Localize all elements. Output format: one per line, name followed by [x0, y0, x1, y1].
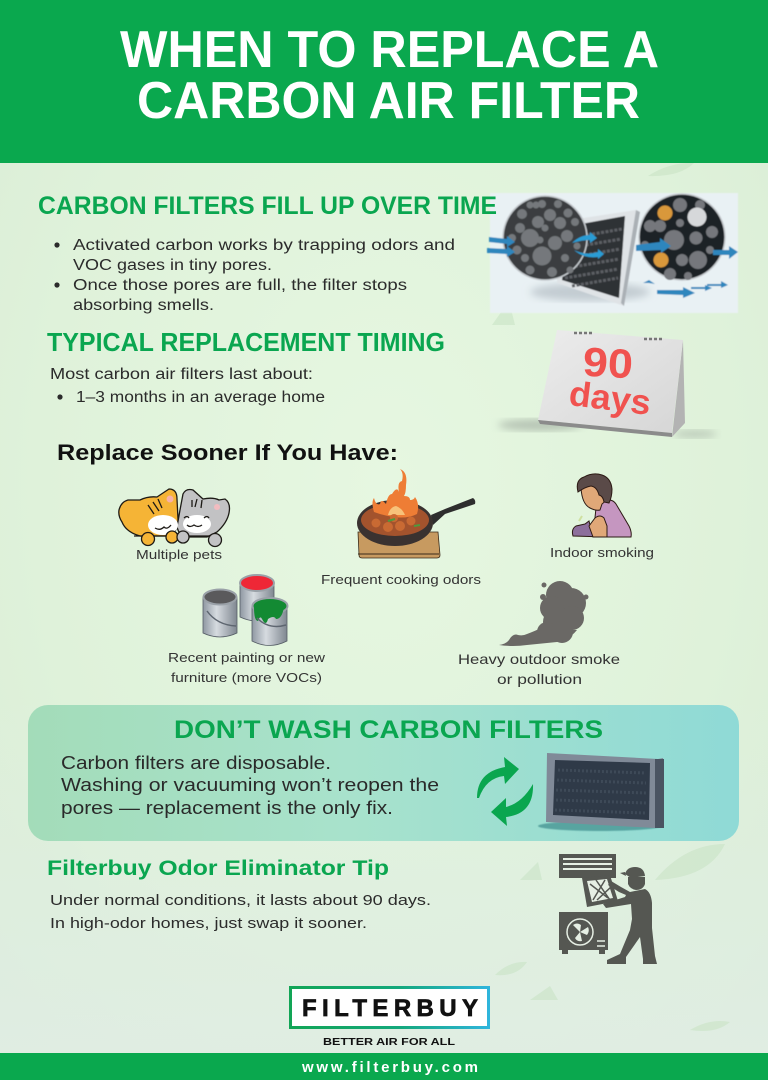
footer bar: [0, 1053, 768, 1080]
icon: carbon filter: [538, 753, 664, 831]
filter frame: [557, 210, 640, 306]
label: Recent painting or new: [168, 650, 326, 665]
panel heading: DON’T WASH CARBON FILTERS: [174, 716, 603, 744]
panel text: Washing or vacuuming won’t reopen the: [61, 775, 439, 795]
bullet list: how carbon works: VOC gases in tiny pores.: [73, 257, 272, 274]
icon: 90 days desk calendar: [498, 330, 717, 438]
label: or pollution: [497, 671, 582, 687]
item: multiple pets: [119, 489, 230, 562]
bullet list: how carbon works: absorbing smells.: [73, 297, 214, 314]
panel: don't wash carbon filters: [28, 705, 739, 841]
bullet list: how carbon works: [54, 237, 455, 314]
website url: www.filterbuy.com: [301, 1059, 478, 1076]
title: [120, 21, 659, 130]
magnified circle right: [639, 194, 725, 280]
magnified circle left: [503, 196, 587, 280]
text: typical lifespan: [50, 366, 325, 406]
bullet list: how carbon works: Once those pores are full, the filter stops: [73, 277, 407, 294]
logo: filterbuy: FILTERBUY: [302, 995, 478, 1022]
header banner: [0, 0, 768, 163]
icon: cats: [119, 489, 230, 546]
item: heavy outdoor smoke: [458, 581, 620, 687]
panel text: Carbon filters are disposable.: [61, 753, 331, 773]
heading: replace sooner: Replace Sooner If You Have:: [57, 440, 398, 465]
icon: green recycle arrows: [477, 757, 533, 826]
illustration: carbon filter with magnified pores: [487, 193, 738, 313]
title: WHEN TO REPLACE A: [120, 21, 659, 79]
bullet list: how carbon works: Activated carbon works by trapping odors and: [73, 237, 455, 254]
icon: technician replacing filter: [559, 854, 657, 964]
icon: man lighting cigarette: [572, 474, 631, 537]
item: recent painting or new furniture: [168, 575, 326, 685]
label: Indoor smoking: [550, 545, 654, 560]
heading: odor eliminator tip: Filterbuy Odor Eliminator Tip: [47, 857, 389, 880]
logo: filterbuy: [290, 988, 488, 1048]
heading: typical replacement timing: TYPICAL REPLACEMENT TIMING: [47, 327, 445, 357]
label: furniture (more VOCs): [171, 670, 322, 685]
text: tip: [50, 892, 431, 932]
label: Multiple pets: [136, 548, 222, 562]
icon: 90 days desk calendar: days: [567, 374, 653, 423]
logo: filterbuy: BETTER AIR FOR ALL: [323, 1036, 456, 1048]
icon: smoke plume: [499, 581, 588, 646]
text: typical lifespan: 1–3 months in an average home: [76, 389, 325, 406]
text: tip: Under normal conditions, it lasts about 90 days.: [50, 892, 431, 909]
item: indoor smoking: [550, 474, 654, 560]
label: Heavy outdoor smoke: [458, 651, 620, 667]
panel text: pores — replacement is the only fix.: [61, 798, 393, 818]
item: frequent cooking odors: [321, 469, 482, 587]
icon: 90 days desk calendar: 90: [582, 339, 634, 387]
label: [458, 651, 620, 687]
icon: flaming pan: [357, 469, 475, 558]
text: typical lifespan: Most carbon air filters last about:: [50, 366, 313, 383]
title: CARBON AIR FILTER: [137, 72, 640, 130]
label: Frequent cooking odors: [321, 572, 482, 587]
label: [168, 650, 326, 685]
blue air-flow arrows: [487, 232, 738, 298]
heading: carbon filters fill up: CARBON FILTERS FILL UP OVER TIME: [38, 192, 497, 220]
text: tip: In high-odor homes, just swap it sooner.: [50, 915, 367, 932]
panel text: [61, 753, 439, 818]
icon: paint cans: [203, 575, 288, 646]
